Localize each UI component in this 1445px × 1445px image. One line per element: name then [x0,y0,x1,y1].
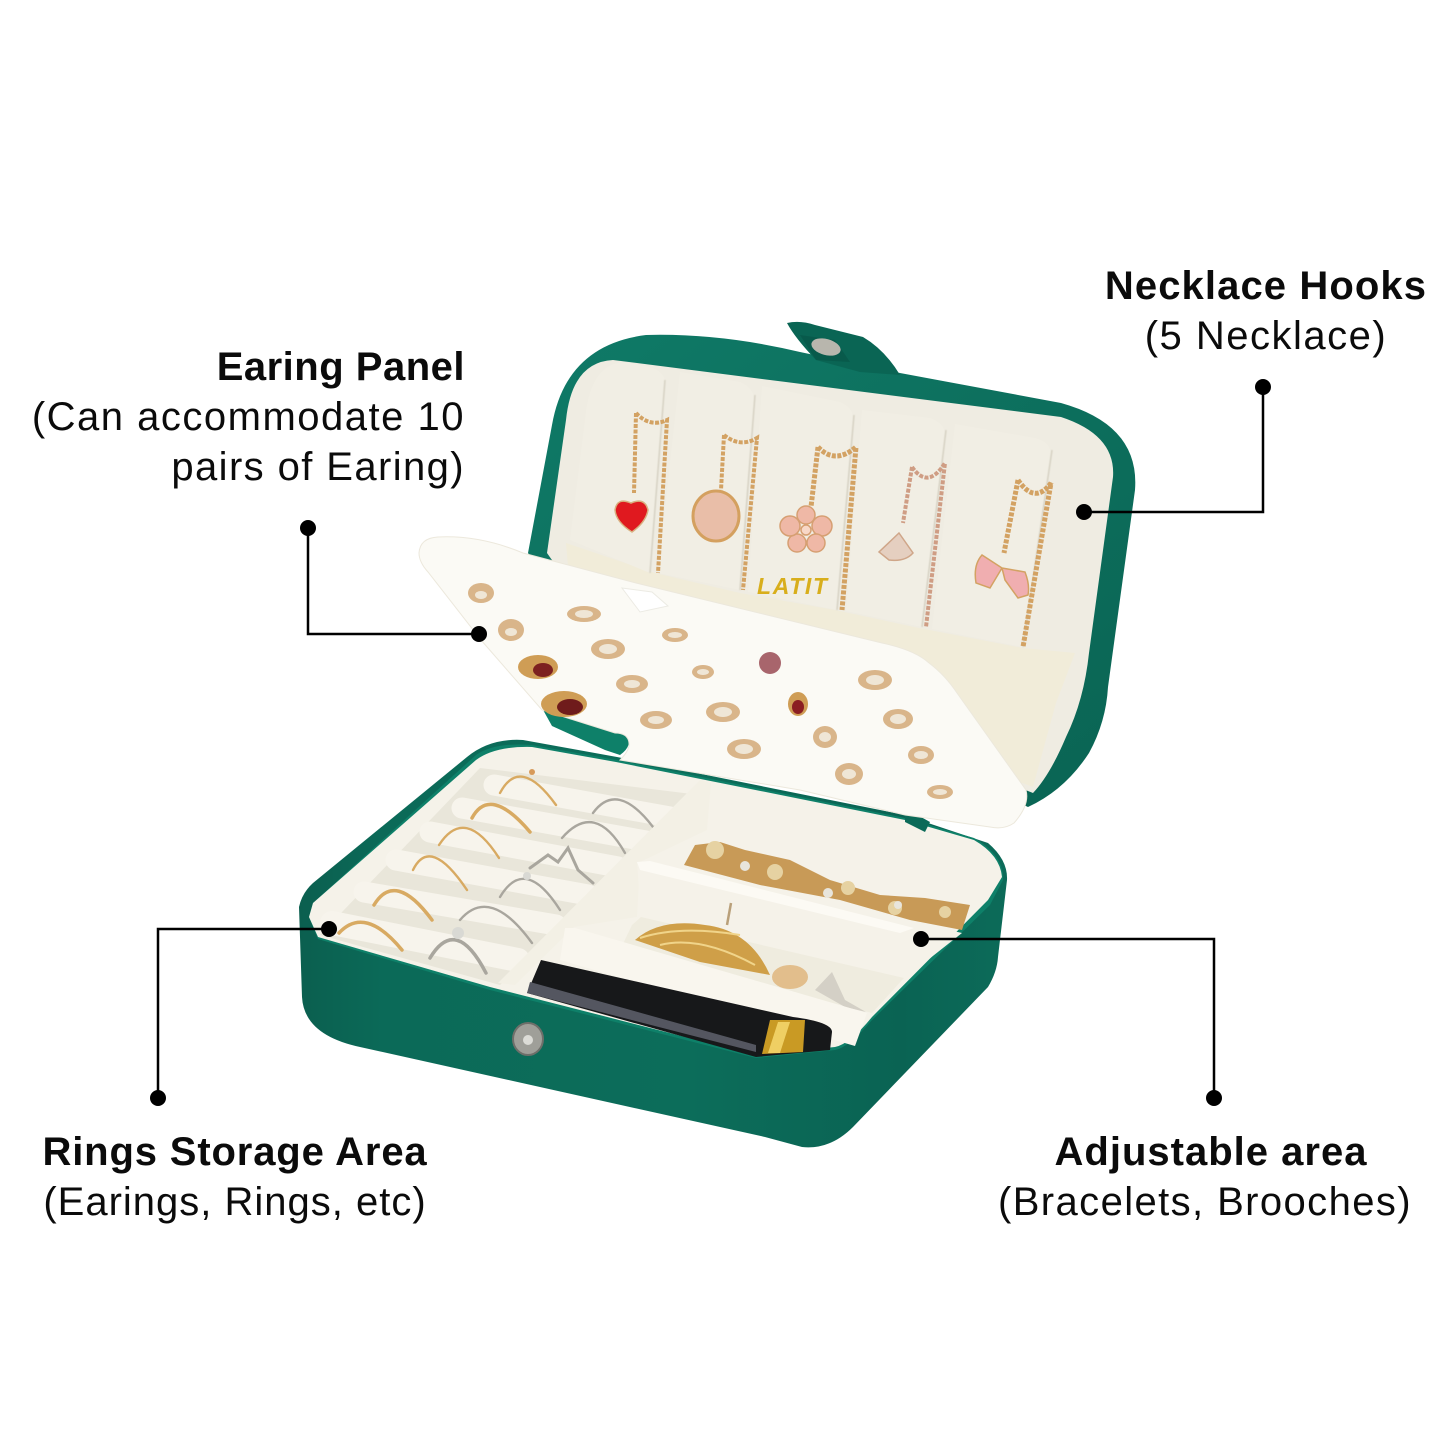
base: cream tray [309,747,1002,1055]
lid: pocket [566,543,1075,787]
leader line: rings storage [150,921,337,1106]
callout: earing panel: (Can accommodate 10 [32,395,465,439]
callout: necklace hooks: Necklace Hooks [1105,264,1427,308]
earring panel: hinged flap [419,537,1027,828]
earring studs: garnet [518,652,808,717]
necklace tabs [570,362,1051,647]
earring studs: gold [468,583,953,799]
charm: round pendant [693,491,739,541]
hinge strip under flap [542,708,629,755]
right hinge [905,812,930,832]
callout: necklace hooks [1105,264,1427,358]
ring compartment floor [320,768,700,985]
callout: rings storage area: Rings Storage Area [42,1130,428,1174]
necklace: chains [634,413,1051,647]
middle divider wall [637,861,962,978]
charm: bow [975,555,1029,598]
callout: rings storage area: (Earings, Rings, etc) [43,1180,427,1224]
lid: cream lining [547,360,1113,793]
leader line: adjustable area [913,931,1222,1106]
callout: earing panel [32,345,465,489]
front snap [513,1023,543,1055]
callout: rings storage area [42,1130,428,1224]
front divider [560,928,867,1046]
rings [339,777,653,973]
leader line: earing panel [300,520,487,642]
third compartment floor [620,917,904,1013]
base: green shell [299,740,1007,1147]
ring rolls [332,785,670,960]
logo on pocket: LATIT [757,573,829,599]
base: bright rim [309,744,1003,1058]
pull tab [622,588,668,612]
callout: adjustable area: Adjustable area [1055,1130,1367,1174]
callout: adjustable area: (Bracelets, Brooches) [998,1180,1412,1224]
gold flower brooches [684,841,970,930]
compartment divider [498,780,711,985]
charm: flower [780,506,832,552]
lid strap with snap [787,322,900,375]
charm: crystal drop [879,533,913,560]
callout: necklace hooks: (5 Necklace) [1145,314,1387,358]
callout: earing panel: pairs of Earing) [171,445,465,489]
lipstick tube [527,960,832,1057]
leader line: necklace hooks [1076,379,1271,520]
callout: adjustable area [998,1130,1412,1224]
tab separators [650,380,1052,647]
charm: heart [615,501,648,532]
gold filigree brooch [635,923,770,975]
callout: earing panel: Earing Panel [217,345,465,389]
lid: green shell [528,322,1135,807]
